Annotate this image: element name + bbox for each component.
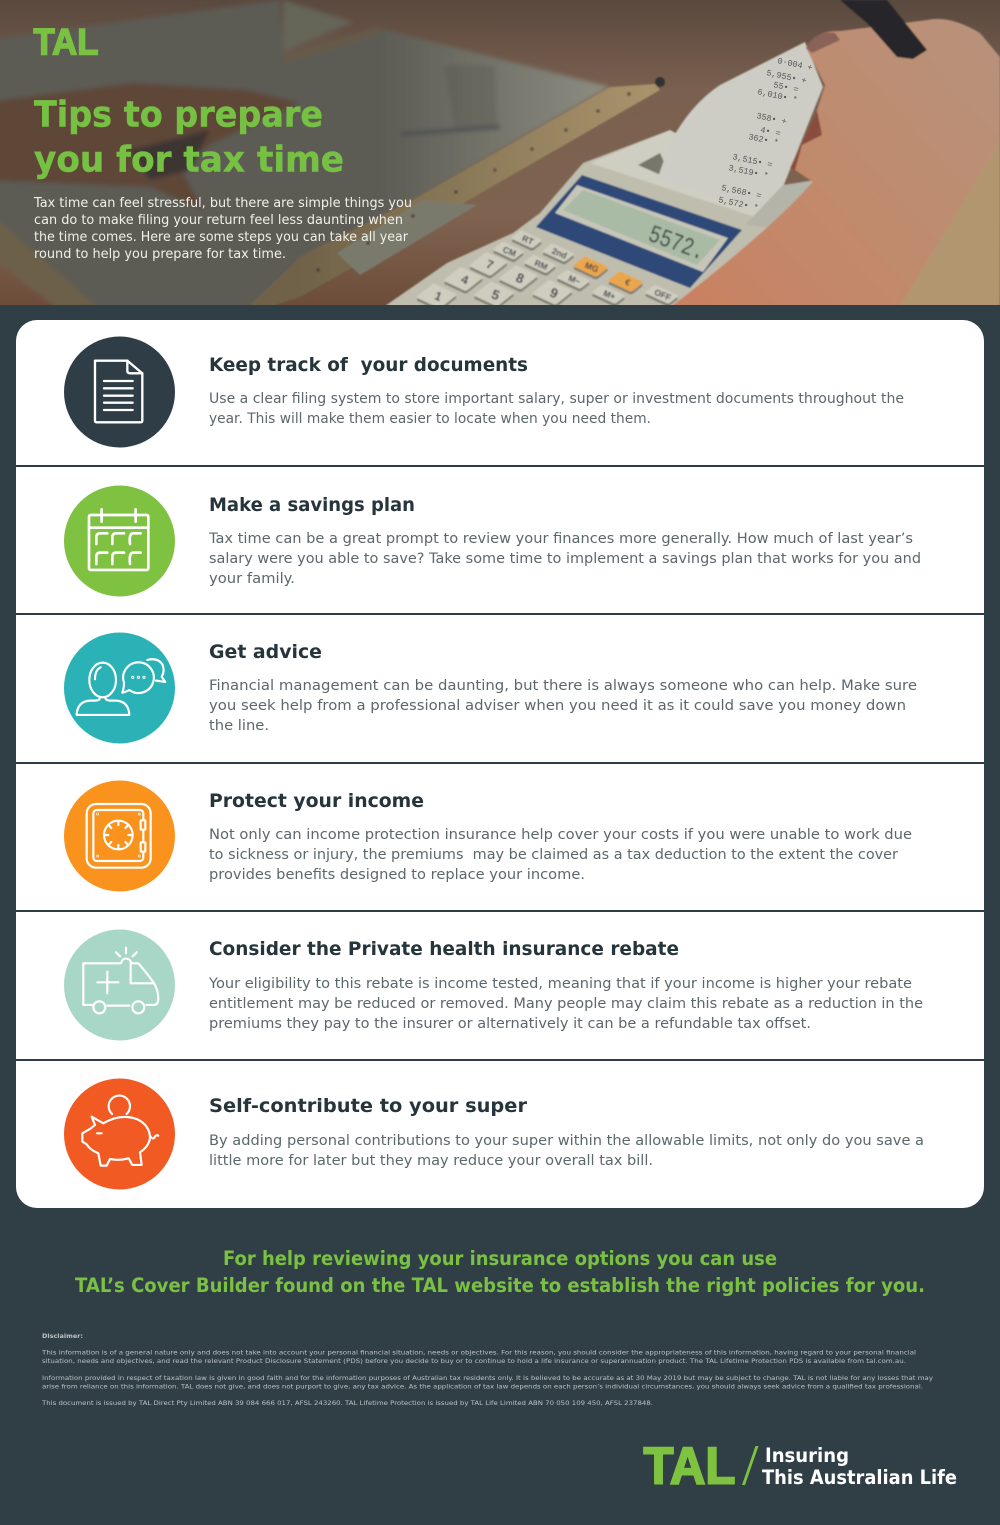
calculator keys: 2nd	[550, 246, 568, 261]
receipt figures: 358• +	[755, 111, 787, 127]
body text: Not only can income protection insurance help cover your costs if you were unable to work due	[209, 827, 912, 843]
receipt figures: 3,515• =	[731, 152, 773, 170]
disclaimer: Information provided in respect of taxation law is given in good faith and for the information purposes of Australian tax residents only. It is believed to be accurate as at 30 May 2019 but may be subject to change. TAL is not liable for any losses that may	[42, 1374, 933, 1382]
icon: calendar	[64, 486, 175, 596]
hero intro text: round to help you prepare for tax time.	[34, 247, 286, 262]
body text: your family.	[209, 571, 295, 587]
heading: Keep track of your documents	[209, 354, 528, 376]
hero photo: calculator and receipt on a desk	[0, 0, 1000, 310]
receipt figures: 5,572• *	[717, 195, 759, 213]
tip 2: make a savings plan	[64, 486, 921, 596]
hero intro text	[33, 196, 412, 262]
calculator keys: 4	[459, 272, 471, 287]
receipt figures: 55• =	[772, 80, 799, 95]
calculator keys: RM	[533, 258, 549, 272]
heading: Get advice	[209, 641, 322, 663]
hero title: Tips to prepare	[34, 94, 323, 136]
calculator keys: 1	[432, 289, 444, 304]
panel: tips list	[16, 320, 984, 1208]
disclaimer	[41, 1332, 933, 1407]
calculator keys: OFF	[653, 287, 673, 303]
calculator display digits: 5572.	[644, 220, 709, 267]
footer logo and tagline: TAL	[644, 1438, 736, 1496]
disclaimer: Disclaimer:	[42, 1332, 83, 1340]
hero intro text: the time comes. Here are some steps you can take all year	[34, 230, 409, 245]
body text: to sickness or injury, the premiums may be claimed as a tax deduction to the extent the cover	[209, 847, 898, 863]
body text	[208, 976, 923, 1032]
hero title: you for tax time	[34, 140, 344, 180]
receipt figures: 5,568• =	[720, 183, 762, 201]
icon: safe	[64, 780, 175, 892]
pen	[840, 0, 927, 59]
call to action	[75, 1247, 925, 1297]
body text	[209, 678, 917, 734]
receipt figures: 4• =	[759, 125, 781, 139]
body text: provides benefits designed to replace your income.	[209, 867, 585, 883]
hero intro text: can do to make filing your return feel less daunting when	[34, 213, 403, 228]
calculator keys: RT	[521, 233, 536, 247]
body text: Tax time can be a great prompt to review your finances more generally. How much of last year’s	[208, 531, 913, 547]
tip 1: keep track of your documents	[64, 336, 904, 448]
receipt figures: 0·004 +	[776, 56, 813, 73]
icon: piggy bank	[64, 1078, 175, 1190]
call to action: For help reviewing your insurance options you can use	[223, 1247, 777, 1270]
footer logo and tagline	[644, 1438, 957, 1496]
call to action: TAL’s Cover Builder found on the TAL website to establish the right policies for you.	[75, 1274, 925, 1297]
calculator keys	[416, 230, 679, 309]
body text: salary were you able to save? Take some time to implement a savings plan that works for you and	[209, 551, 921, 567]
disclaimer: This document is issued by TAL Direct Pty Limited ABN 39 084 666 017, AFSL 243260. TAL Lifetime Protection is issued by TAL Life Limited ABN 70 050 109 450, AFSL 237848.	[41, 1399, 653, 1407]
disclaimer: arise from reliance on this information. TAL does not give, and does not purport to give, any tax advice. As the application of tax law depends on each person’s individual circumstances, you should always seek advice from a qualified tax professional.	[42, 1382, 923, 1390]
icon: document	[64, 336, 175, 448]
heading: Self-contribute to your super	[209, 1095, 528, 1117]
calculator keys: MG	[583, 260, 600, 275]
calculator keys: €	[624, 277, 632, 288]
body text: entitlement may be reduced or removed. Many people may claim this rebate as a reduction in the	[209, 996, 923, 1012]
disclaimer: situation, needs and objectives, and read the relevant Product Disclosure Statement (PDS) before you decide to buy or to continue to hold a life insurance or superannuation product. The TAL Lifetime Protection PDS is available from tal.com.au.	[42, 1357, 906, 1365]
tip 3: get advice	[64, 632, 917, 744]
footer logo and tagline: Insuring	[765, 1444, 849, 1467]
body text: Use a clear filing system to store important salary, super or investment documents throughout the	[209, 391, 904, 407]
tip 5: private health insurance rebate	[64, 930, 923, 1040]
calculator keys: 5	[489, 286, 502, 303]
icon: person with speech bubbles	[64, 632, 175, 744]
TAL logo top: TAL	[34, 22, 98, 62]
icon: ambulance	[64, 930, 175, 1040]
body text: premiums they pay to the insurer or alternatively it can be a refundable tax offset.	[209, 1016, 811, 1032]
receipt figures: 6,010• *	[756, 87, 798, 105]
body text: Financial management can be daunting, but there is always someone who can help. Make sure	[209, 678, 917, 694]
hand and arm	[893, 135, 1000, 306]
tip 6: self-contribute to your super	[64, 1078, 924, 1190]
hero intro text: Tax time can feel stressful, but there are simple things you	[33, 196, 412, 211]
heading: Make a savings plan	[209, 494, 415, 516]
disclaimer: This information is of a general nature only and does not take into account your personal financial situation, needs or objectives. For this reason, you should consider the appropriateness of this information, having regard to your personal financial	[41, 1348, 916, 1356]
body text: the line.	[209, 718, 269, 734]
receipt figures: 5,955• +	[765, 68, 807, 86]
body text	[209, 1133, 924, 1169]
heading: Consider the Private health insurance rebate	[209, 938, 679, 960]
calculator keys: M−	[567, 273, 582, 287]
body text	[209, 391, 904, 427]
hero title	[34, 94, 344, 180]
body text: year. This will make them easier to locate when you need them.	[209, 411, 651, 427]
receipt figures: 3,519• *	[727, 163, 769, 181]
calculator keys: 7	[484, 257, 496, 272]
calculator body	[385, 130, 767, 305]
footer logo and tagline: This Australian Life	[762, 1466, 957, 1489]
heading: Protect your income	[209, 790, 424, 812]
calculator keys: M+	[602, 288, 617, 302]
body text	[209, 827, 912, 883]
receipt figures	[717, 56, 813, 213]
body text: By adding personal contributions to your super within the allowable limits, not only do you save a	[209, 1133, 924, 1149]
receipt paper	[657, 42, 823, 210]
calculator keys: CM	[501, 244, 518, 259]
body text	[208, 531, 921, 587]
calculator keys: 8	[514, 270, 526, 286]
tip 4: protect your income	[64, 780, 912, 892]
calculator keys: 9	[548, 285, 560, 301]
body text: little more for later but they may reduce your overall tax bill.	[209, 1153, 653, 1169]
body text: you seek help from a professional adviser when you need it as it could save you money down	[209, 698, 906, 714]
clipboard frame	[250, 84, 660, 310]
receipt figures: 362• *	[747, 132, 779, 148]
body text: Your eligibility to this rebate is income tested, meaning that if your income is higher your rebate	[208, 976, 912, 992]
